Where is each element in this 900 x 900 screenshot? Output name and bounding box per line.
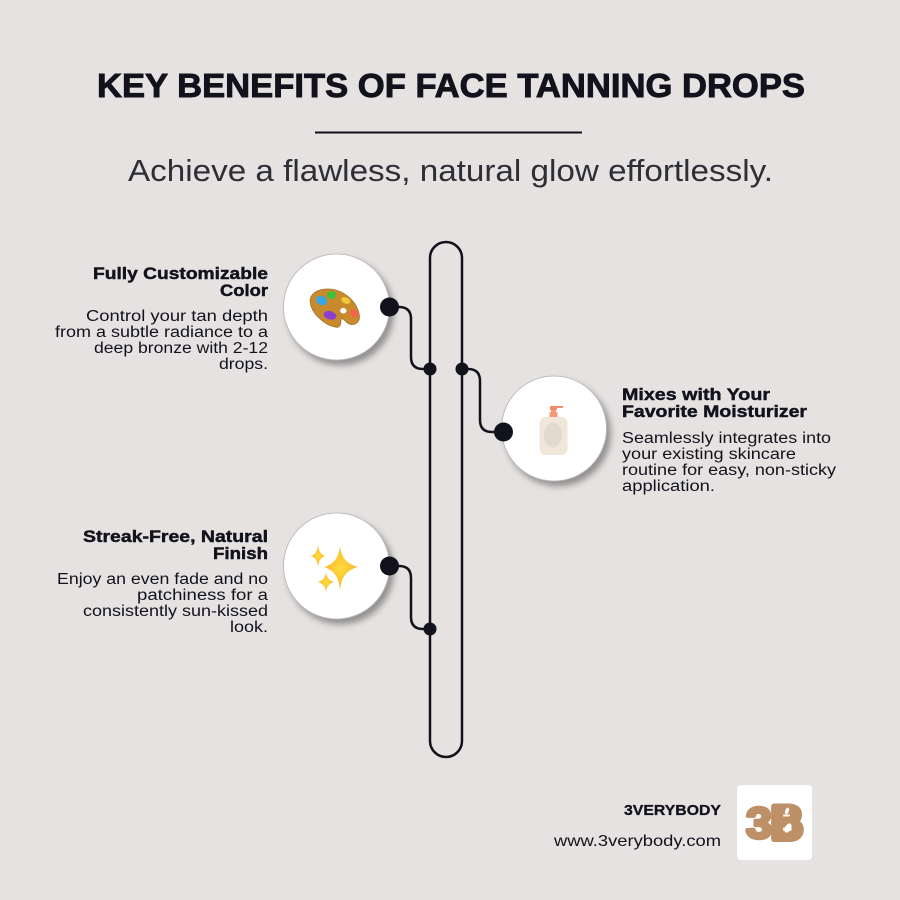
- heading: fully customizable color: [93, 264, 268, 300]
- logo: 3: [746, 799, 772, 848]
- central track: [430, 242, 462, 757]
- title: KEY BENEFITS OF FACE TANNING DROPS: [97, 67, 805, 104]
- heading: streak-free natural finish: Finish: [213, 544, 268, 563]
- footer: brand name: 3VERYBODY: [624, 802, 721, 819]
- logo: [737, 785, 812, 860]
- text: moisturizer description: application.: [622, 478, 715, 495]
- text: moisturizer description: routine for easy, non-sticky: [622, 462, 836, 479]
- connector: left bottom: [380, 556, 436, 636]
- text: customizable color description: Control your tan depth: [86, 308, 268, 325]
- logo: B: [771, 796, 803, 849]
- footer: website: www.3verybody.com: [553, 833, 721, 850]
- text: moisturizer description: your existing skincare: [622, 446, 796, 463]
- text: streak-free description: look.: [230, 619, 268, 636]
- text: streak-free description: patchiness for a: [137, 587, 268, 604]
- text: customizable color description: [55, 308, 268, 373]
- heading: fully customizable color: Color: [220, 281, 268, 300]
- heading: mixes with your favorite moisturizer: Favorite Moisturizer: [622, 402, 807, 421]
- heading: streak-free natural finish: [83, 527, 268, 563]
- panel: streak-free natural finish: [57, 513, 436, 636]
- icon circle: sparkles: [284, 513, 390, 619]
- panel: mixes with your favorite moisturizer: [456, 362, 836, 495]
- text: customizable color description: deep bronze with 2-12: [94, 340, 268, 357]
- connector: right: [456, 362, 513, 442]
- text: streak-free description: consistently sun-kissed: [83, 603, 268, 620]
- text: streak-free description: Enjoy an even fade and no: [57, 571, 268, 588]
- heading: fully customizable color: Fully Customizable: [93, 264, 268, 283]
- text: moisturizer description: [622, 430, 836, 495]
- panel: fully customizable color: [55, 254, 436, 376]
- text: moisturizer description: Seamlessly integrates into: [622, 430, 831, 447]
- heading: mixes with your favorite moisturizer: Mixes with Your: [622, 385, 770, 404]
- connector: left top: [380, 298, 436, 376]
- icon circle: palette: [284, 254, 390, 360]
- heading: mixes with your favorite moisturizer: [622, 385, 807, 421]
- text: customizable color description: from a subtle radiance to a: [55, 324, 268, 341]
- heading: streak-free natural finish: Streak-Free, Natural: [83, 527, 268, 546]
- icon circle: lotion bottle: [502, 376, 606, 481]
- subtitle: Achieve a flawless, natural glow effortlessly.: [128, 153, 773, 188]
- text: streak-free description: [57, 571, 268, 636]
- text: customizable color description: drops.: [219, 356, 268, 373]
